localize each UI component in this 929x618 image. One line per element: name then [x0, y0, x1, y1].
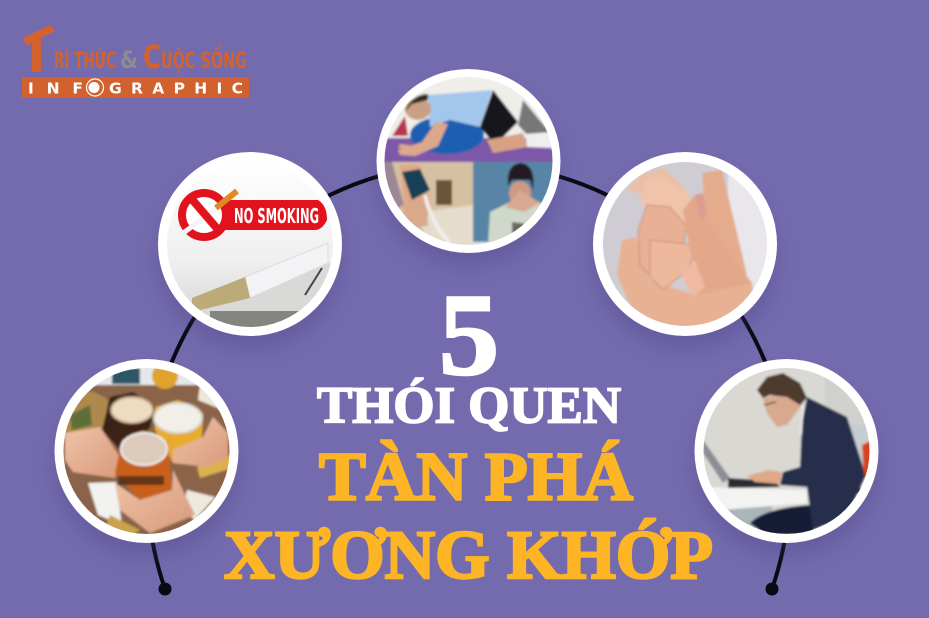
thumb	[683, 195, 752, 295]
dot: left arc end	[158, 582, 172, 596]
hand: right	[173, 417, 228, 467]
back finger	[627, 166, 687, 195]
connecting arc	[147, 163, 790, 589]
photo circle: finger cracking	[593, 152, 777, 349]
logo: orange bar	[22, 77, 249, 98]
glass: dark beer	[102, 392, 155, 450]
desk	[705, 487, 807, 510]
trousers	[750, 505, 815, 535]
logo: brand name big C: C	[143, 38, 161, 76]
title: line 1: THÓI QUEN	[317, 376, 621, 434]
suit	[780, 397, 865, 530]
logo: brand name right: UỘC SỐNG	[161, 45, 247, 74]
ball	[410, 116, 484, 154]
right finger	[702, 170, 747, 275]
shorts	[480, 90, 518, 145]
hand: front	[115, 470, 195, 533]
chair	[856, 486, 861, 494]
legs	[487, 133, 527, 153]
logo: ring icon	[86, 79, 104, 96]
logo: infographic left: INF	[28, 80, 83, 98]
sign: red ring	[182, 193, 226, 237]
title: line 3: XƯƠNG KHỚP	[224, 517, 713, 593]
photo circle: beer toast	[54, 359, 240, 556]
logo: roof T mark	[23, 25, 55, 72]
sign: cigarette	[174, 207, 218, 240]
photo circle: no smoking	[158, 152, 342, 349]
logo: infographic right: GRAPHIC	[109, 80, 243, 98]
sign: red pill	[222, 200, 327, 230]
arm	[398, 122, 448, 156]
hand: left	[65, 427, 120, 478]
title: line 2: TÀN PHÁ	[319, 438, 633, 514]
big cigarette filter	[192, 277, 250, 312]
glass: golden beer	[154, 400, 203, 463]
head	[405, 98, 431, 120]
no smoking sign	[174, 191, 327, 240]
index finger	[640, 190, 691, 224]
dot: right arc end	[766, 582, 778, 596]
logo: ampersand: &	[120, 46, 138, 74]
logo	[22, 25, 249, 98]
photo circle: overweight, blood pressure, stress	[376, 69, 563, 266]
glass: amber beer	[115, 430, 172, 500]
fingernail	[682, 260, 705, 295]
photo circle: bad posture at laptop	[694, 359, 878, 556]
bottom-right panel	[472, 160, 552, 244]
title	[224, 271, 713, 593]
hands	[747, 470, 782, 484]
big cigarette paper	[245, 243, 328, 298]
laptop	[703, 440, 730, 483]
sign text: NO SMOKING	[234, 204, 319, 228]
title: number 5: 5	[439, 271, 499, 400]
sign: slash	[190, 197, 220, 232]
main hand	[616, 236, 754, 326]
shirt	[428, 90, 492, 127]
head	[763, 393, 803, 427]
curled knuckles	[638, 205, 687, 285]
bottom-left panel	[391, 160, 474, 232]
logo: brand name left: RÍ THỨC	[54, 48, 116, 74]
